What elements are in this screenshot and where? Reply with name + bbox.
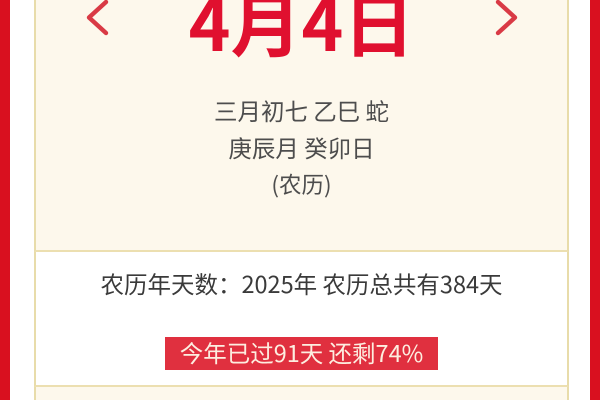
panel: date section <box>34 0 569 252</box>
panel: year days section <box>34 252 569 387</box>
panel: lower section <box>34 387 569 400</box>
text: lunar label: (农历) <box>271 168 332 200</box>
right red border <box>590 0 600 400</box>
badge: year progress: 今年已过91天 还剩74% <box>180 335 423 369</box>
left red border <box>0 0 10 400</box>
text: month and day stems: 庚辰月 癸卯日 <box>228 130 375 164</box>
icon: next arrow <box>496 0 518 36</box>
icon: previous arrow <box>86 0 108 36</box>
text: lunar year days: 农历年天数：2025年 农历总共有384天 <box>100 266 503 300</box>
text: lunar date: 三月初七 乙巳 蛇 <box>214 93 389 127</box>
